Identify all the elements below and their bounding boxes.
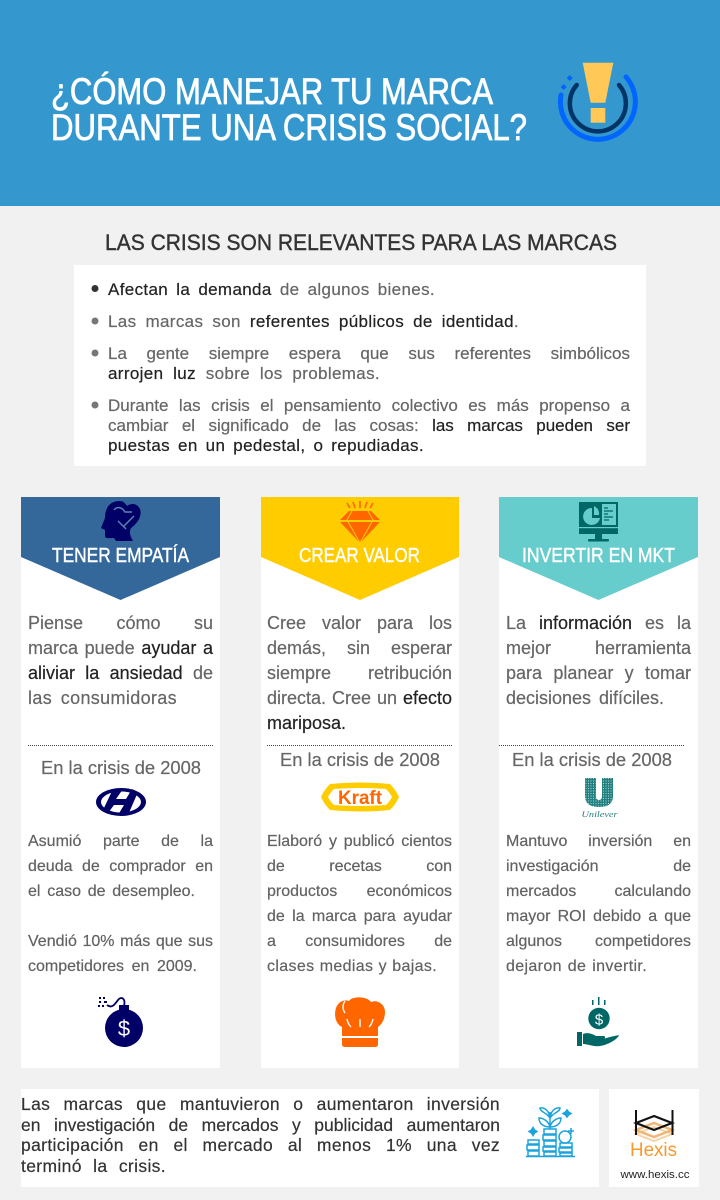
- panel: crear valor: [261, 497, 459, 1068]
- text block: value advice: siempre retribución: [267, 663, 452, 683]
- subheading: En la crisis de 2008: [41, 757, 201, 778]
- text block: hyundai case: deuda de comprador en: [28, 858, 213, 875]
- text block: hyundai case: el caso de desempleo.: [28, 883, 195, 900]
- text block: conclusion: en investigación de mercados y publicidad aumentaron: [21, 1115, 500, 1135]
- text block: relevance bullet 4: cambiar el significado de las cosas: las marcas pueden ser: [108, 416, 630, 435]
- text block: hyundai case: Asumió parte de la: [28, 833, 213, 850]
- text block: empathy advice: las consumidoras: [28, 688, 177, 708]
- text block: unilever case: Mantuvo inversión en: [506, 833, 691, 850]
- text block: conclusion: terminó la crisis.: [21, 1156, 166, 1176]
- logo: kraft: [321, 782, 399, 812]
- text block: relevance bullet 4: puestas en un pedestal, o repudiadas.: [108, 436, 424, 455]
- text block: marketing advice: mejor herramienta: [506, 638, 691, 658]
- header banner: [0, 0, 720, 206]
- website: www.hexis.cc: [619, 1169, 690, 1181]
- subheading: En la crisis de 2008: [280, 749, 440, 770]
- text block: hyundai case: Vendió 10% más que sus: [28, 933, 213, 950]
- icon: exclamation alert: [560, 63, 635, 139]
- text block: marketing advice: [506, 613, 692, 708]
- text block: value advice: demás, sin esperar: [267, 638, 452, 658]
- panel: hexis logo: [609, 1089, 699, 1187]
- text block: kraft case: de la marca para ayudar: [267, 908, 452, 925]
- panel: relevance list background: [74, 265, 646, 466]
- panel: tener empatía: [21, 497, 220, 1068]
- brand name: Hexis: [630, 1140, 677, 1161]
- text block: marketing advice: La información es la: [506, 613, 691, 633]
- text block: relevance bullet 4: Durante las crisis el pensamiento colectivo es más propenso a: [108, 396, 630, 415]
- text block: value advice: directa. Cree un efecto: [267, 688, 452, 708]
- text block: kraft case: a consumidores de: [267, 933, 452, 950]
- text block: relevance bullet 3: [108, 344, 630, 383]
- text block: hyundai case: competidores en 2009.: [28, 958, 197, 975]
- logo: unilever: [582, 778, 619, 819]
- icon: head with heart: [101, 501, 141, 541]
- text block: conclusion: Las marcas que mantuvieron o aumentaron inversión: [21, 1094, 500, 1114]
- text block: kraft case: [267, 833, 452, 975]
- text block: unilever case: mayor ROI debido a que: [506, 908, 691, 925]
- text block: marketing advice: para planear y tomar: [506, 663, 691, 683]
- logo: hyundai: [96, 788, 146, 816]
- text block: empathy advice: marca puede ayudar a: [28, 638, 213, 658]
- text block: relevance bullet 3: La gente siempre espera que sus referentes simbólicos: [108, 344, 630, 363]
- text block: empathy advice: Piense cómo su: [28, 613, 213, 633]
- title: DURANTE UNA CRISIS SOCIAL?: [51, 107, 527, 148]
- text block: kraft case: clases medias y bajas.: [267, 958, 437, 975]
- text block: unilever case: algunos competidores: [506, 933, 691, 950]
- logo: kraft: Kraft: [338, 788, 383, 809]
- text block: empathy advice: [28, 613, 214, 708]
- section heading: LAS CRISIS SON RELEVANTES PARA LAS MARCAS: [105, 230, 617, 255]
- column title: INVERTIR EN MKT: [522, 545, 675, 567]
- panel: conclusion: [21, 1089, 599, 1187]
- text block: relevance bullet 4: [108, 396, 630, 455]
- logo: unilever: Unilever: [582, 810, 619, 819]
- title: [51, 71, 527, 148]
- text block: unilever case: [506, 833, 691, 975]
- text block: empathy advice: aliviar la ansiedad de: [28, 663, 213, 683]
- text block: hyundai case: [28, 833, 214, 975]
- text block: kraft case: de recetas con: [267, 858, 452, 875]
- icon: monitor with chart: [579, 502, 618, 542]
- text block: unilever case: investigación de: [506, 858, 691, 875]
- text block: conclusion: [21, 1094, 500, 1176]
- column title: TENER EMPATÍA: [52, 544, 190, 567]
- text block: relevance bullet 3: arrojen luz sobre los problemas.: [108, 364, 380, 383]
- title: ¿CÓMO MANEJAR TU MARCA: [51, 71, 493, 112]
- column title: CREAR VALOR: [299, 545, 420, 567]
- text block: value advice: Cree valor para los: [267, 613, 452, 633]
- icon: dollar coin over hand: [577, 997, 619, 1046]
- text block: unilever case: mercados calculando: [506, 883, 691, 900]
- text block: value advice: mariposa.: [267, 713, 346, 733]
- text block: marketing advice: decisiones difíciles.: [506, 688, 664, 708]
- subheading: En la crisis de 2008: [512, 749, 672, 770]
- icon: diamond: [340, 501, 380, 543]
- text block: relevance bullet 1: Afectan la demanda de algunos bienes.: [108, 280, 435, 299]
- text block: relevance bullet 2: Las marcas son referentes públicos de identidad.: [108, 312, 519, 331]
- text block: unilever case: dejaron de invertir.: [506, 958, 647, 975]
- icon: dollar bomb: [98, 997, 143, 1047]
- text block: value advice: [267, 613, 452, 734]
- panel: invertir en mkt: [499, 497, 698, 1068]
- text block: kraft case: Elaboró y publicó cientos: [267, 833, 452, 850]
- icon: chef hat: [335, 997, 385, 1047]
- text block: conclusion: participación en el mercado al menos 1% una vez: [21, 1135, 500, 1155]
- text block: kraft case: productos económicos: [267, 883, 452, 900]
- icon: dollar coin over hand: $: [595, 1012, 604, 1028]
- icon: growing coins: [526, 1108, 575, 1156]
- logo: hexis mark: [636, 1110, 672, 1141]
- icon: dollar bomb: $: [118, 1016, 130, 1041]
